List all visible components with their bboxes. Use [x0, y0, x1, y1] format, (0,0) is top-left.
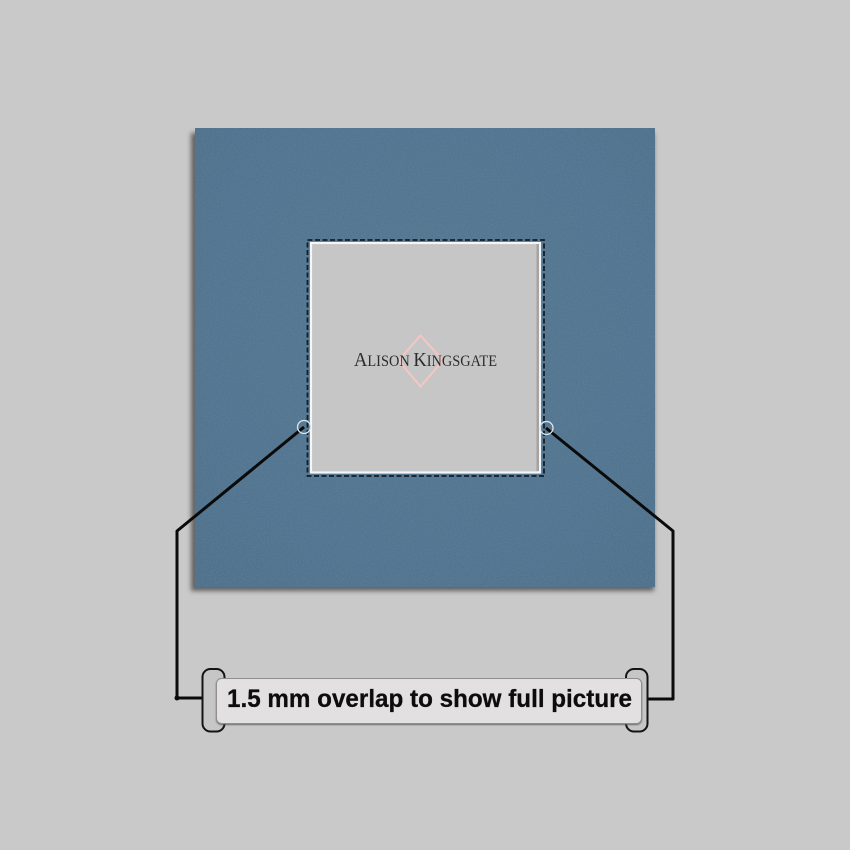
panel: window opening: [308, 240, 544, 476]
window with white bevel: [311, 243, 540, 472]
left marker circle: [298, 420, 310, 434]
arrow: right leader line: [540, 422, 673, 699]
left leader end dot: [174, 696, 180, 700]
board surface: [195, 128, 655, 587]
right marker circle: [540, 422, 553, 434]
board paper texture: [195, 128, 655, 587]
left leader path: [177, 427, 304, 698]
arrow: left leader line: [174, 420, 310, 700]
panel: blue mount board: [191, 128, 655, 591]
right leader path: [546, 428, 673, 699]
callout: overlap label: [202, 669, 648, 732]
label pill: [216, 678, 642, 724]
board drop shadow: [191, 133, 654, 591]
left bracket tab: [202, 669, 224, 732]
icon: pink diamond: [398, 336, 443, 386]
logo: Alison Kingsgate: [354, 336, 497, 386]
right bracket tab: [626, 669, 648, 732]
logo wordmark: ALISON KINGSGATE: [354, 349, 497, 371]
inner right edge shading: [536, 244, 539, 471]
dashed overlap outline: [308, 240, 544, 476]
label text: 1.5 mm overlap to show full picture: [227, 685, 632, 713]
